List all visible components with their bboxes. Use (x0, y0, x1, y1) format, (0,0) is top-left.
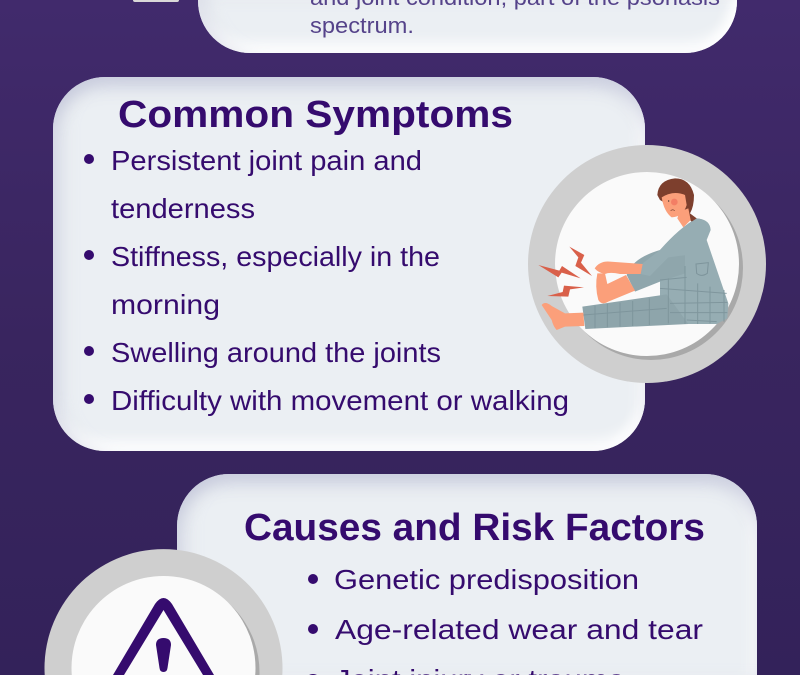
definition text (310, 0, 720, 38)
symptoms list: tenderness (111, 193, 255, 224)
torso and hips (660, 218, 728, 324)
definition text: spectrum. (310, 13, 414, 38)
causes list (308, 564, 703, 675)
left foot (542, 303, 584, 330)
outstretched leg (582, 294, 688, 329)
face (662, 193, 687, 217)
raised foot (596, 273, 635, 303)
hand (595, 262, 643, 274)
icon: partial circle at top edge (133, 0, 179, 2)
neck (677, 208, 691, 227)
hair and braid (657, 178, 697, 222)
sleeve (641, 218, 710, 276)
symptoms list: Persistent joint pain and (111, 145, 422, 176)
heading: common symptoms: Common Symptoms (118, 94, 513, 136)
raised knee (627, 250, 685, 292)
symptoms list: Swelling around the joints (111, 337, 441, 368)
panel: causes and risk factors (177, 474, 757, 675)
panel: common symptoms (53, 77, 645, 451)
symptoms list: Difficulty with movement or walking (111, 385, 569, 416)
causes list: Age-related wear and tear (335, 614, 703, 645)
heading: causes and risk factors: Causes and Risk Factors (244, 507, 705, 549)
panel: definition (cropped) (198, 0, 737, 53)
symptoms list: morning (111, 289, 220, 320)
symptoms list: Stiffness, especially in the (111, 241, 440, 272)
symptoms list (84, 145, 569, 416)
pain bolts (569, 247, 592, 276)
causes list: Genetic predisposition (334, 564, 639, 595)
